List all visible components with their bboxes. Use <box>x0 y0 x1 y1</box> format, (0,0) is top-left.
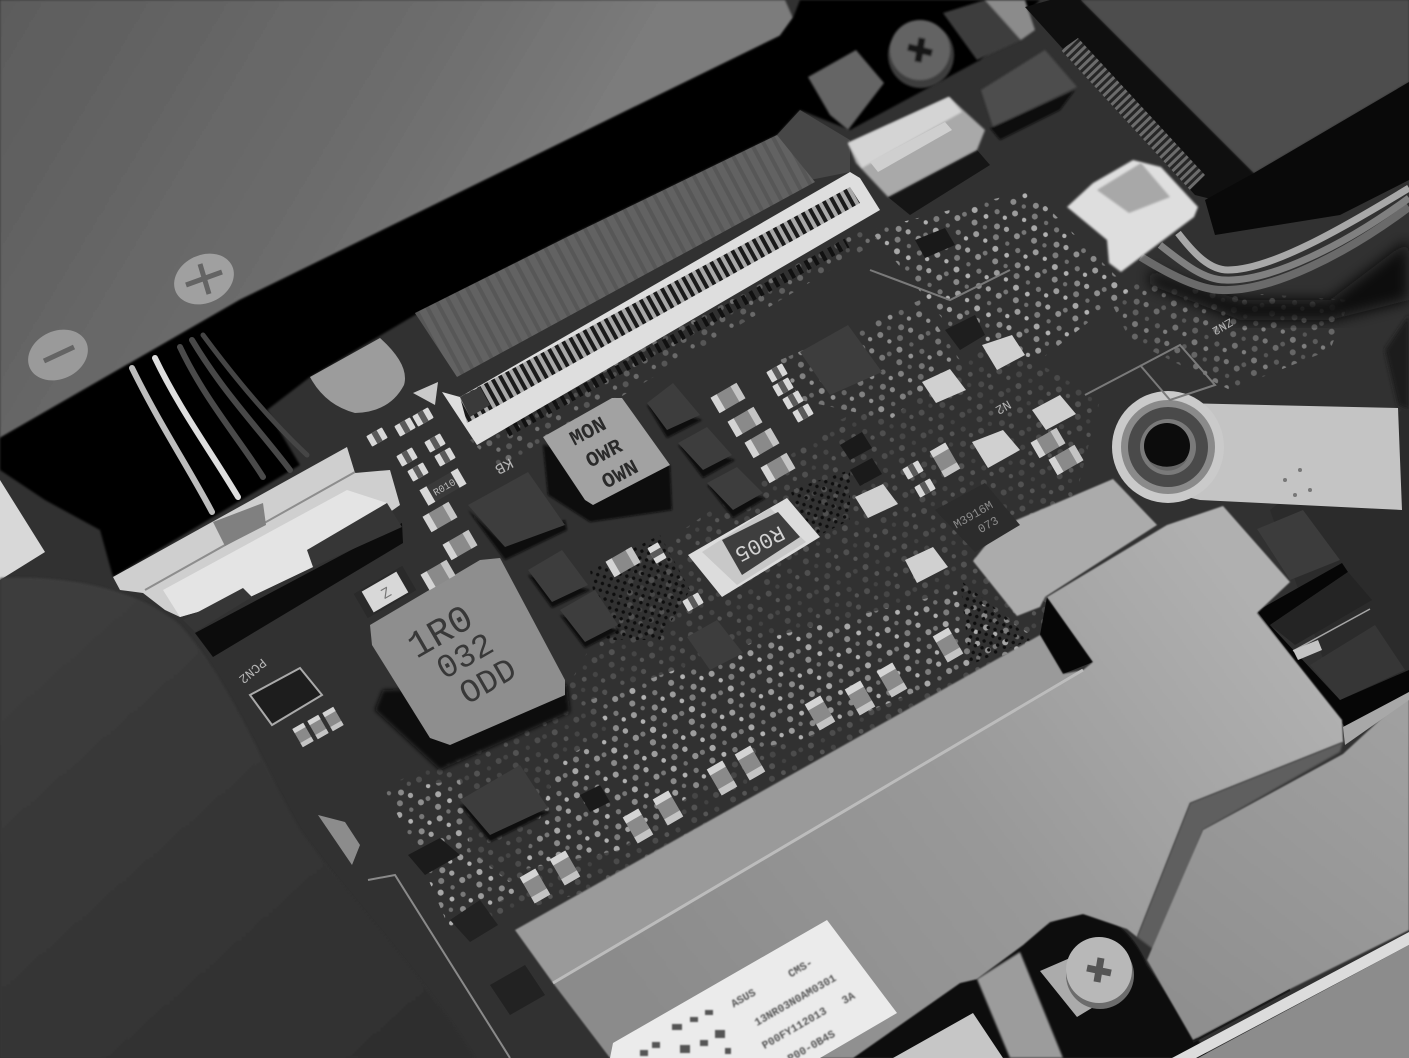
inductor marking: 1R0 <box>401 598 482 669</box>
battery wires <box>132 335 307 512</box>
inductor marking: ODD <box>454 652 524 714</box>
sticker text <box>730 957 858 1058</box>
small inductor marking: MON <box>567 414 611 452</box>
board silkscreen labels: PCN2 <box>236 655 269 686</box>
icon: top screw <box>888 20 954 88</box>
icon: minus terminal mark <box>20 320 96 390</box>
icon: heatsink screw <box>1066 937 1134 1009</box>
chip markings: 073 <box>976 514 1001 537</box>
panel: top keyboard connector <box>808 50 990 215</box>
panel: small inductor <box>543 398 672 522</box>
panel: fan cable connector <box>1067 160 1409 320</box>
panel: battery pack, top left <box>0 0 793 438</box>
panel: R005 current sense resistor <box>688 498 820 597</box>
small inductor marking: OWR <box>583 436 627 474</box>
sticker text: ASUS <box>730 987 759 1011</box>
panel: round silver pad <box>310 338 438 413</box>
white Z marked capacitor <box>354 566 416 618</box>
sticker text: 13NR03N0AM0301 <box>753 973 839 1030</box>
chip markings: M3916M <box>951 499 996 532</box>
panel: ceramic capacitors <box>250 363 1083 903</box>
board silkscreen labels <box>236 315 1235 686</box>
panel: ribbon cable tail <box>415 110 850 377</box>
panel: white clip at left edge <box>0 480 45 580</box>
board trace outline <box>368 875 510 1058</box>
main shield body <box>553 506 1343 1058</box>
inductor marking: 032 <box>431 627 501 689</box>
white Z marked capacitor: Z <box>379 584 395 604</box>
panel: right side chips <box>1257 510 1409 727</box>
panel: foam pad, bottom left <box>0 578 475 1058</box>
sticker text: 3A <box>840 991 858 1008</box>
panel: metal heatsink shield <box>515 479 1409 1058</box>
panel: large inductor 1R0 <box>370 558 570 770</box>
right plate <box>1147 693 1409 1040</box>
sticker text: CMS- <box>787 957 815 981</box>
panel: silver pads <box>855 335 1076 583</box>
board silkscreen labels: ZN2 <box>1209 315 1235 337</box>
panel: right side dark fan area <box>1270 315 1409 720</box>
small resistor <box>419 468 467 506</box>
panel: MOSFET and IC chips <box>408 228 1020 1015</box>
panel: top connector block <box>943 0 1077 140</box>
small inductor marking: OWN <box>599 457 643 495</box>
board silkscreen labels: N2 <box>992 397 1014 417</box>
resistor marking: R005 <box>730 519 788 566</box>
panel: dark recess around lower screw <box>853 914 1210 1058</box>
small inductor marking <box>567 414 643 495</box>
panel: black gap under battery <box>0 0 1040 577</box>
panel: long ribbon connector <box>442 172 880 445</box>
sticker QR code area <box>640 1010 731 1056</box>
upper tab of shield <box>973 479 1157 616</box>
panel: SSD slot and drive <box>1025 0 1409 235</box>
icon: plus terminal mark <box>166 244 242 314</box>
icon: mounting hole with washer <box>1112 391 1402 510</box>
label: white product sticker <box>610 920 897 1058</box>
panel: battery connector <box>113 447 403 657</box>
fold shadow <box>1137 742 1343 952</box>
small silver pad by foam <box>318 815 360 865</box>
small resistor: R010 <box>432 478 458 499</box>
inductor marking <box>401 598 524 714</box>
board silkscreen labels: KB <box>492 454 516 477</box>
lower band of shield <box>515 635 1083 983</box>
sticker text: P00FY112013 <box>761 1006 830 1053</box>
